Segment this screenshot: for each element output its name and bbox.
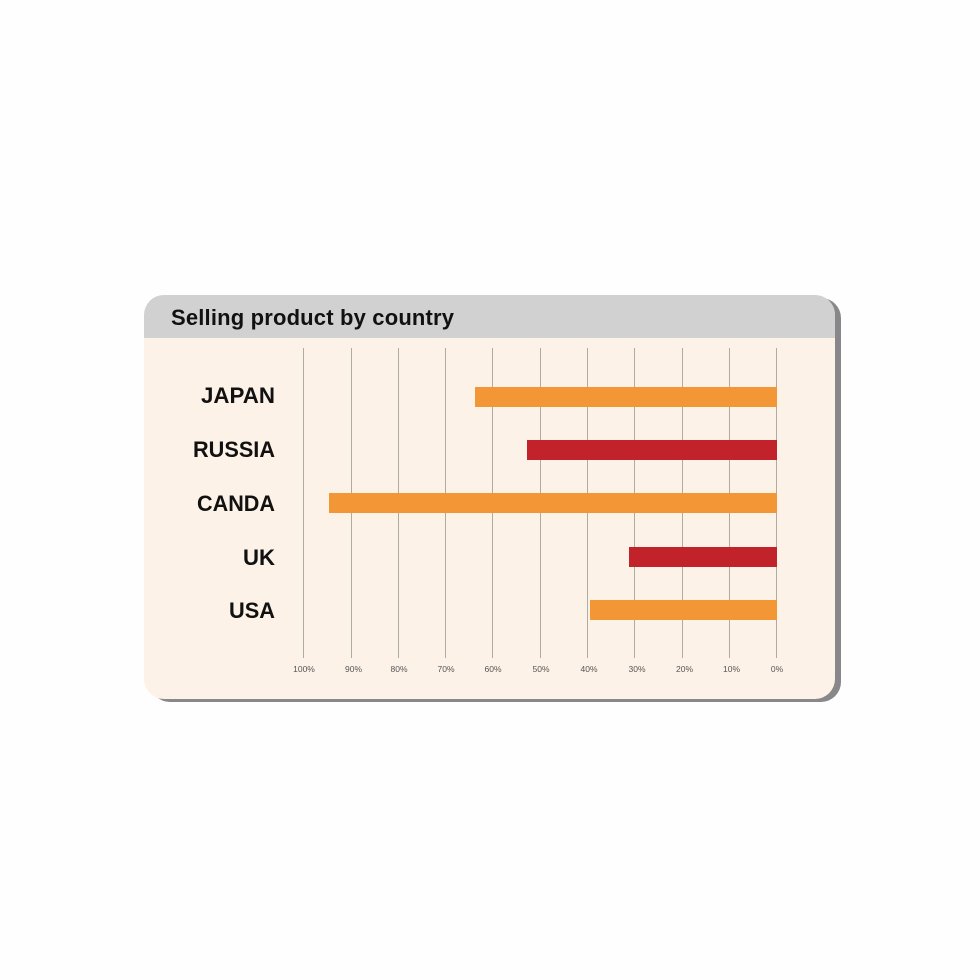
axis labels (293, 664, 784, 674)
axis labels: 80% (390, 664, 408, 674)
bar: Canada (329, 493, 777, 513)
grid lines (304, 348, 776, 658)
axis labels: 60% (484, 664, 502, 674)
panel: chart card (144, 295, 841, 702)
axis labels: 40% (580, 664, 598, 674)
bar: USA (590, 600, 777, 620)
country labels: CANDA (197, 491, 275, 516)
axis labels: 70% (437, 664, 455, 674)
axis labels: 90% (345, 664, 362, 674)
country labels: USA (229, 598, 275, 623)
card shadow (150, 298, 841, 702)
axis labels: 20% (676, 664, 693, 674)
country labels: JAPAN (201, 383, 275, 408)
bar: Russia (527, 440, 777, 460)
axis labels: 0% (771, 664, 784, 674)
bar: UK (629, 547, 777, 567)
bar: Japan (475, 387, 777, 407)
axis labels: 30% (628, 664, 646, 674)
country labels: RUSSIA (193, 437, 275, 462)
title: Selling product by country (171, 305, 455, 330)
country labels (193, 383, 275, 623)
card body (144, 295, 835, 699)
axis labels: 10% (723, 664, 740, 674)
axis labels: 50% (532, 664, 550, 674)
header bar (144, 295, 835, 338)
axis labels: 100% (293, 664, 315, 674)
bar chart (329, 387, 777, 620)
country labels: UK (243, 545, 275, 570)
